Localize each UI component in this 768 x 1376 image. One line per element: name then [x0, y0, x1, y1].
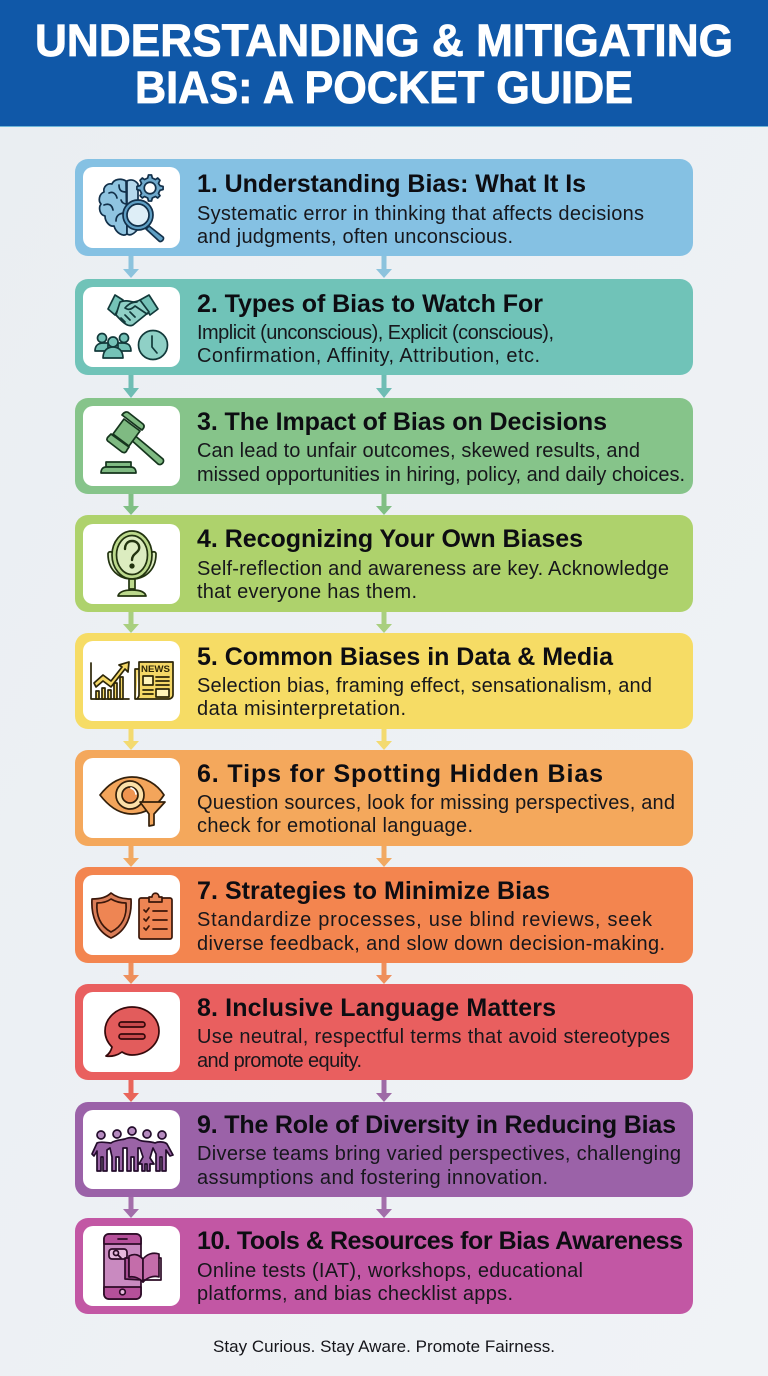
body text: Use neutral, respectful terms that avoid stereotypes	[197, 1026, 670, 1048]
body text: Online tests (IAT), workshops, educational	[197, 1260, 583, 1282]
body text: data misinterpretation.	[197, 698, 406, 720]
icon: speech bubble	[105, 1007, 159, 1056]
panel 8: inclusive language	[75, 984, 693, 1080]
panel 3: impact on decisions	[75, 398, 693, 494]
panel 4: recognizing your own biases	[75, 515, 693, 612]
arrows 6 to 7	[123, 846, 392, 867]
body text: Diverse teams bring varied perspectives, challenging	[197, 1143, 681, 1165]
body text: Implicit (unconscious), Explicit (conscious),	[197, 322, 554, 344]
arrows 5 to 6	[123, 729, 392, 750]
body text	[197, 558, 669, 603]
panel 6: spotting hidden bias	[75, 750, 693, 846]
panel 2: types of bias	[75, 279, 693, 375]
body text: and promote equity.	[197, 1050, 362, 1072]
heading: 3. The Impact of Bias on Decisions	[197, 408, 607, 436]
arrows 4 to 5	[123, 612, 392, 633]
body text: Question sources, look for missing perspectives, and	[197, 792, 675, 814]
arrows 1 to 2	[123, 256, 392, 278]
arrows 7 to 8	[123, 963, 392, 984]
panel 7: minimizing bias	[75, 867, 693, 963]
body text: Systematic error in thinking that affects decisions	[197, 203, 644, 225]
body text: and judgments, often unconscious.	[197, 226, 513, 248]
icon: eye and funnel	[100, 777, 165, 826]
arrows 8 to 9	[123, 1080, 392, 1102]
header banner	[0, 0, 768, 127]
icon: group of people	[92, 1127, 173, 1171]
panel 9: role of diversity	[75, 1102, 693, 1197]
body text: platforms, and bias checklist apps.	[197, 1283, 513, 1305]
body text: Self-reflection and awareness are key. Acknowledge	[197, 558, 669, 580]
icon: gavel	[101, 412, 164, 473]
icon: shield and checklist	[92, 893, 172, 939]
body text: Standardize processes, use blind reviews, seek	[197, 909, 653, 931]
panel 10: tools and resources	[75, 1218, 693, 1314]
body text	[197, 1026, 670, 1072]
heading: 9. The Role of Diversity in Reducing Bias	[197, 1111, 676, 1139]
body text: that everyone has them.	[197, 581, 417, 603]
title: BIAS: A POCKET GUIDE	[135, 62, 633, 113]
heading: 4. Recognizing Your Own Biases	[197, 525, 583, 553]
arrows 2 to 3	[123, 375, 392, 398]
icon: chart and newspaper	[91, 662, 173, 699]
body text: Confirmation, Affinity, Attribution, etc.	[197, 345, 540, 367]
body text	[197, 909, 665, 955]
body text: Can lead to unfair outcomes, skewed results, and	[197, 440, 640, 462]
arrows 3 to 4	[123, 494, 392, 515]
heading: 6. Tips for Spotting Hidden Bias	[197, 760, 603, 788]
body text	[197, 675, 652, 720]
body text: Selection bias, framing effect, sensationalism, and	[197, 675, 652, 697]
body text: check for emotional language.	[197, 815, 473, 837]
heading: 2. Types of Bias to Watch For	[197, 290, 543, 318]
title: UNDERSTANDING & MITIGATING	[35, 15, 733, 66]
heading: 8. Inclusive Language Matters	[197, 994, 556, 1022]
icon: handshake, people and clock	[95, 295, 168, 360]
icon: chart and newspaper: NEWS	[141, 664, 170, 674]
heading: 5. Common Biases in Data & Media	[197, 643, 614, 671]
footer tagline: Stay Curious. Stay Aware. Promote Fairness.	[213, 1337, 555, 1356]
body text	[197, 792, 675, 837]
body text: diverse feedback, and slow down decision-making.	[197, 933, 665, 955]
title	[35, 15, 733, 113]
body text	[197, 440, 685, 486]
heading: 7. Strategies to Minimize Bias	[197, 877, 550, 905]
body text	[197, 1143, 681, 1189]
body text	[197, 322, 554, 367]
icon: phone and open book	[104, 1234, 161, 1299]
heading: 1. Understanding Bias: What It Is	[197, 170, 586, 198]
body text: assumptions and fostering innovation.	[197, 1167, 548, 1189]
panel 1: understanding bias	[75, 159, 693, 256]
panel 5: biases in data and media	[75, 633, 693, 729]
body text	[197, 1260, 583, 1305]
arrows 9 to 10	[123, 1197, 392, 1218]
heading: 10. Tools & Resources for Bias Awareness	[197, 1227, 683, 1255]
icon: mirror with question mark	[108, 531, 156, 596]
icon: brain, gear and magnifier	[99, 175, 164, 242]
body text: missed opportunities in hiring, policy, and daily choices.	[197, 464, 685, 486]
body text	[197, 203, 644, 248]
